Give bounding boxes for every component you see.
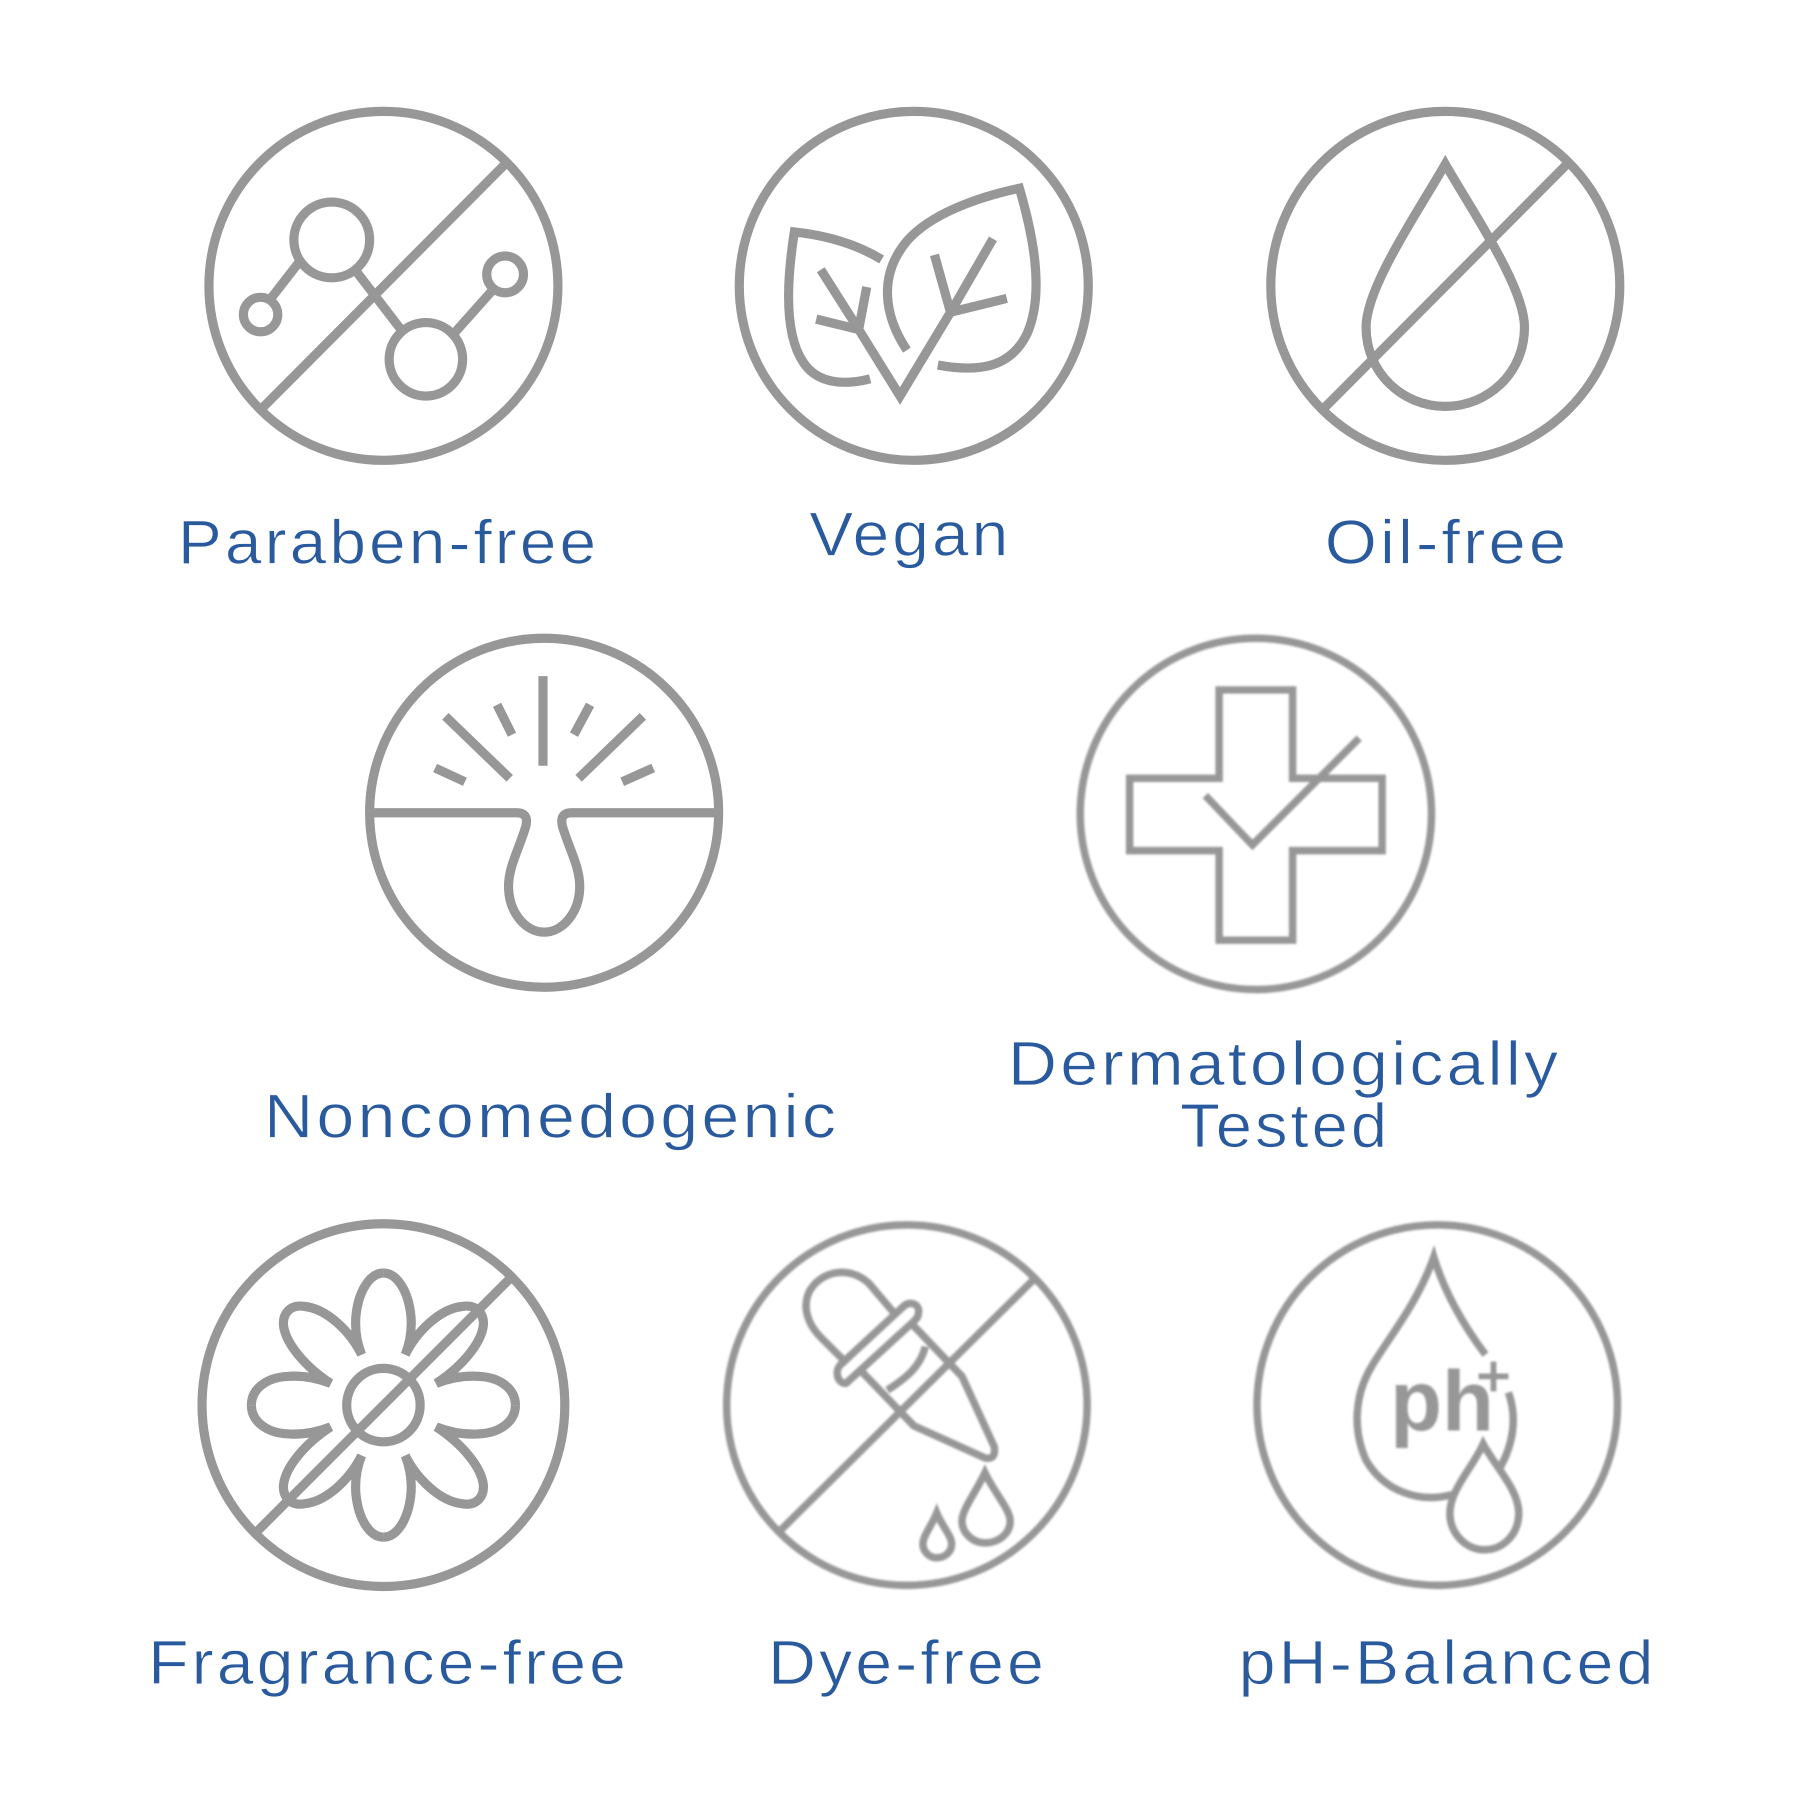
label: oil-free: Oil-free bbox=[1325, 509, 1569, 578]
label: dermatologically tested: Tested bbox=[1180, 1092, 1390, 1161]
icon: noncomedogenic bbox=[368, 638, 720, 987]
label: pH-balanced: pH-Balanced bbox=[1239, 1629, 1657, 1698]
label: dye-free: Dye-free bbox=[768, 1629, 1047, 1698]
icon: paraben-free bbox=[209, 111, 558, 460]
icon: vegan bbox=[739, 111, 1088, 460]
icon: dye-free bbox=[727, 1225, 1087, 1585]
icon: fragrance-free bbox=[202, 1224, 565, 1586]
label: dermatologically tested: Dermatologically bbox=[1008, 1030, 1561, 1099]
label: vegan: Vegan bbox=[809, 501, 1011, 570]
icon: pH-balanced bbox=[1257, 1225, 1617, 1585]
label: paraben-free: Paraben-free bbox=[178, 509, 599, 578]
icon: dermatologically tested bbox=[1080, 638, 1432, 990]
label: fragrance-free: Fragrance-free bbox=[148, 1629, 629, 1698]
icon: pH-balanced: ph bbox=[1390, 1353, 1494, 1448]
label: dermatologically tested bbox=[1008, 1030, 1561, 1161]
icon: oil-free bbox=[1271, 111, 1620, 460]
label: noncomedogenic: Noncomedogenic bbox=[264, 1083, 839, 1152]
